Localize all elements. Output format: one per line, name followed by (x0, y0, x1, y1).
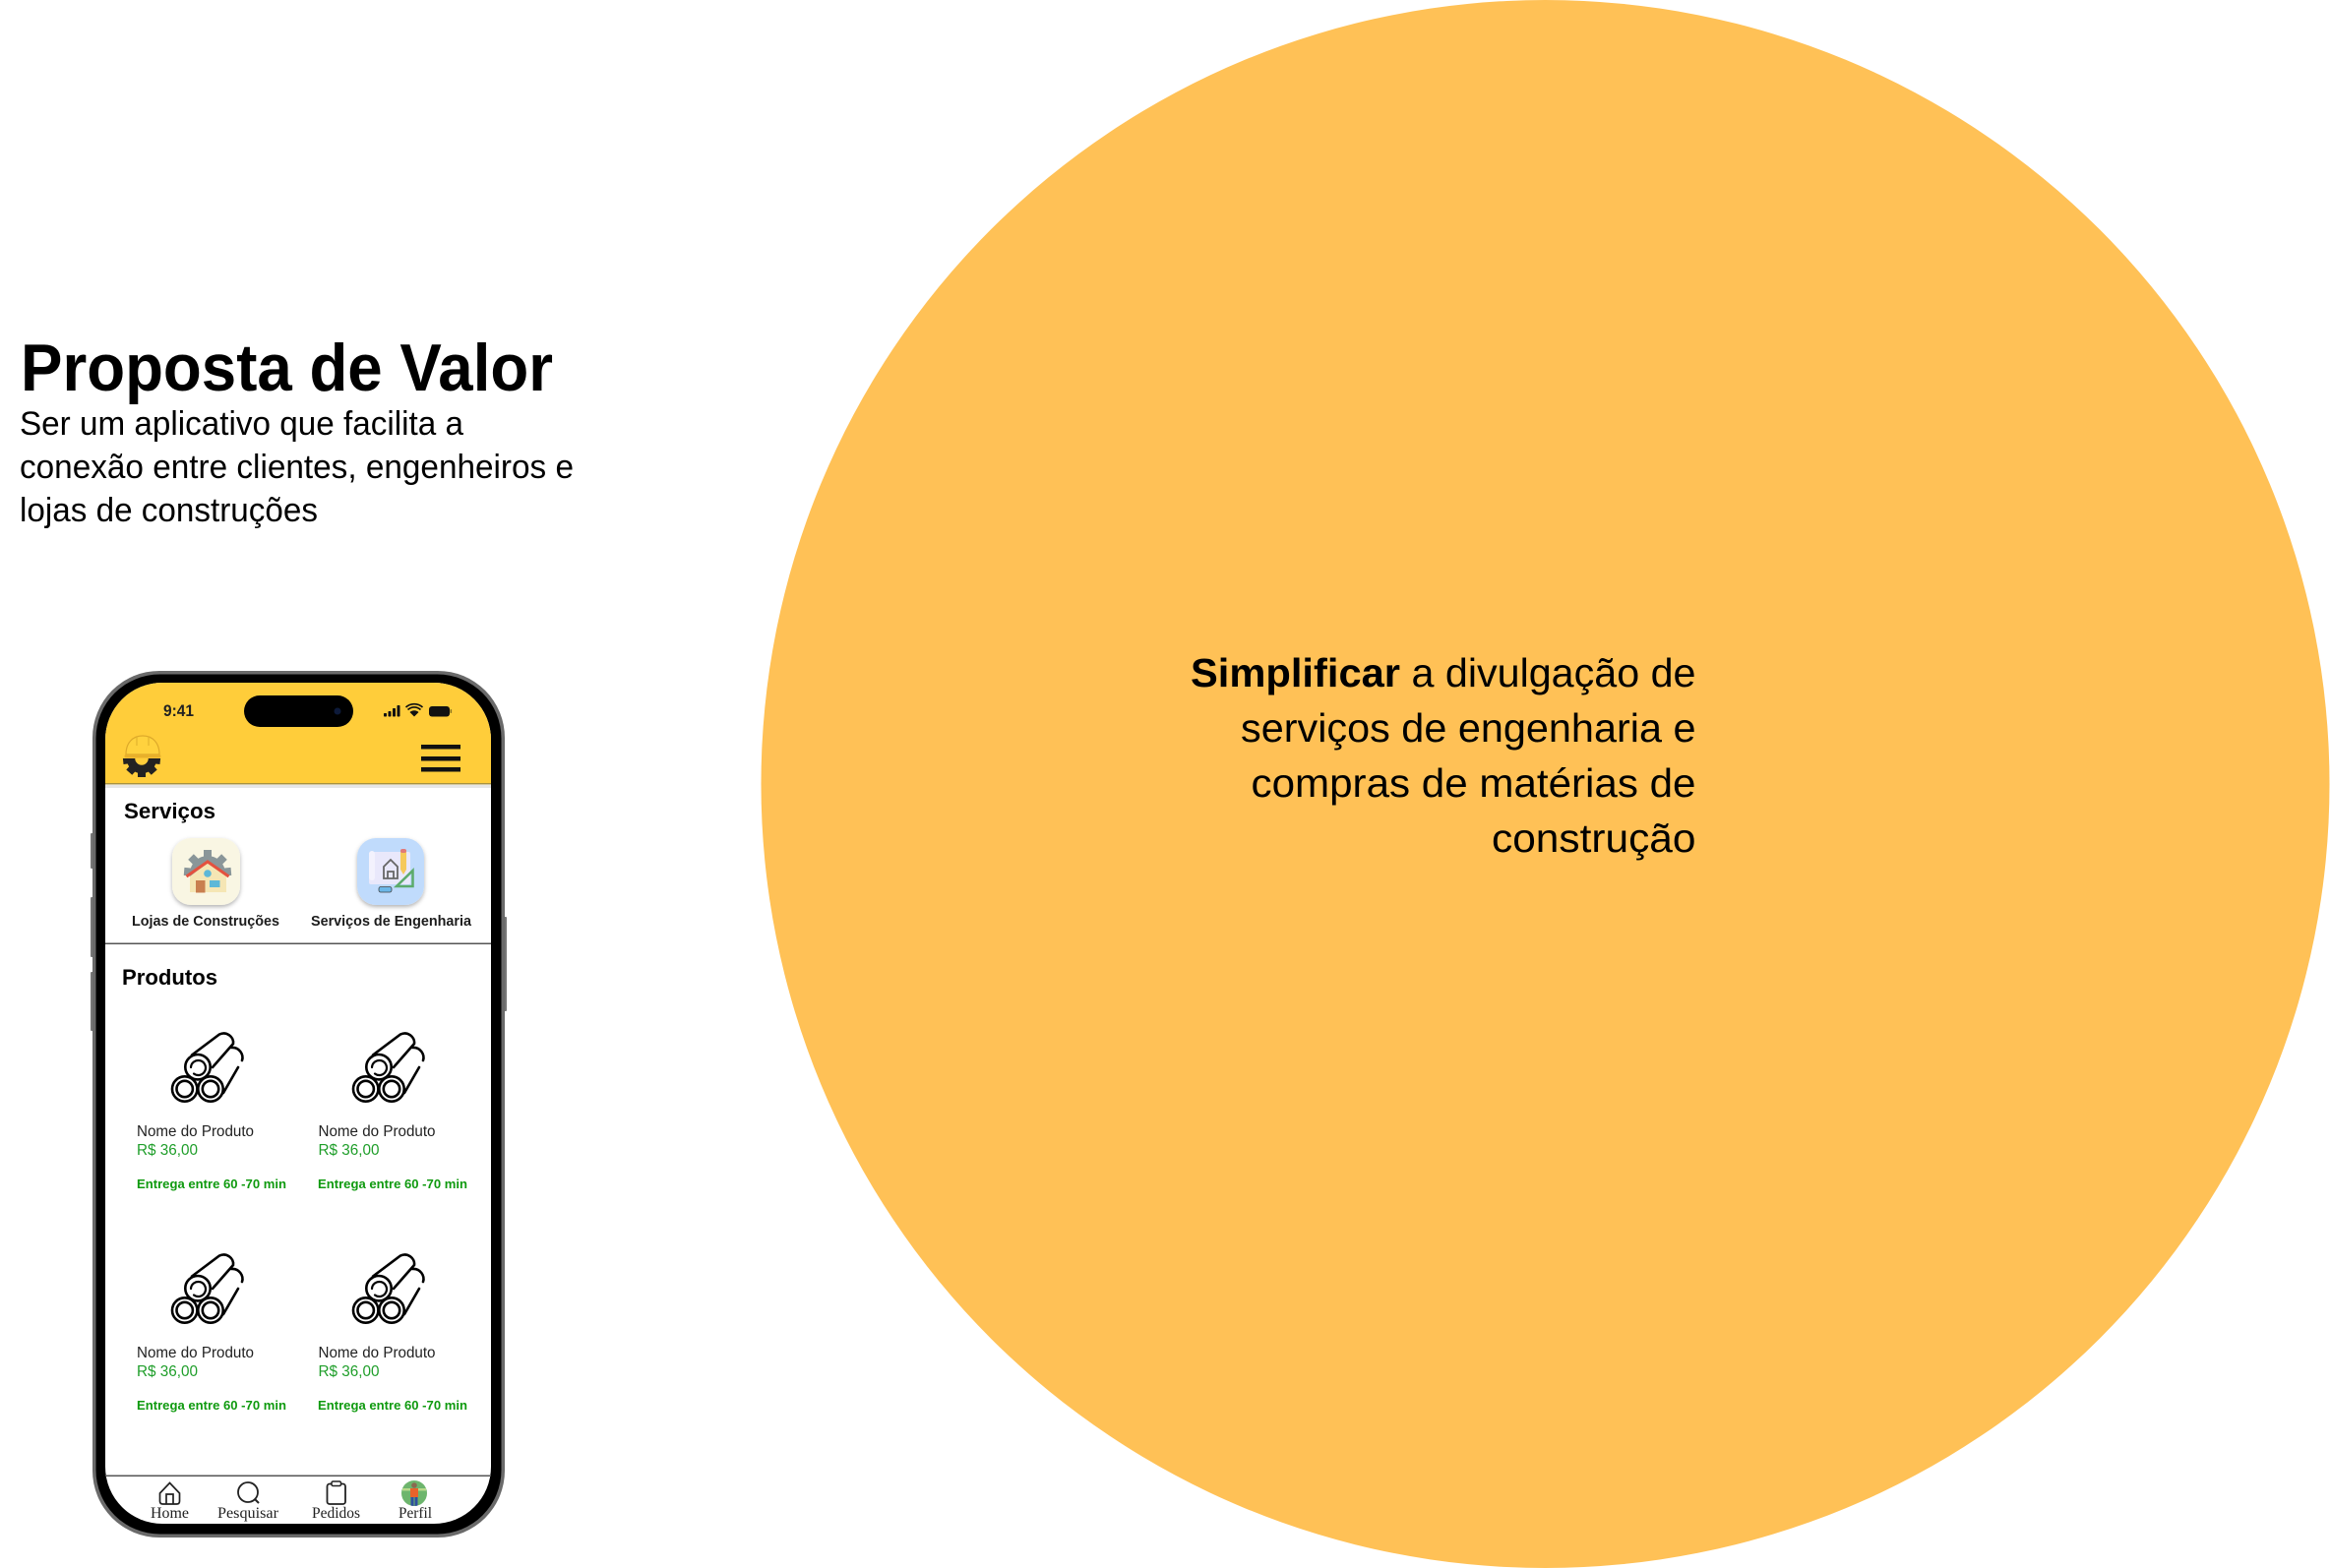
nav: home (151, 1483, 189, 1522)
circle statement text (1191, 650, 1696, 861)
service icon: serviços de engenharia (357, 838, 424, 905)
circle statement text: construção (1492, 815, 1696, 861)
nav: pedidos (312, 1481, 360, 1522)
product card 2: Entrega entre 60 -70 min (318, 1176, 467, 1191)
circle statement text: serviços de engenharia e (1241, 705, 1696, 751)
product card 3: R$ 36,00 (137, 1363, 198, 1380)
product card 2: Nome do Produto (319, 1123, 435, 1140)
nav: pesquisar: Pesquisar (217, 1505, 279, 1522)
product card 4: Entrega entre 60 -70 min (318, 1398, 467, 1413)
phone frame (92, 671, 505, 1538)
product card 2 (318, 1033, 467, 1191)
nav: home: Home (151, 1505, 189, 1522)
service labels (132, 914, 472, 930)
product card 4: Nome do Produto (319, 1345, 435, 1361)
circle statement text: a divulgação de (1411, 650, 1696, 695)
services heading: Serviços (124, 799, 215, 823)
dynamic island (244, 695, 353, 727)
product card 2: R$ 36,00 (319, 1142, 380, 1159)
status icons (384, 704, 452, 716)
nav: perfil: Perfil (399, 1505, 433, 1522)
products heading: Produtos (122, 965, 217, 990)
title: Proposta de Valor (21, 331, 553, 405)
product card 1: Entrega entre 60 -70 min (137, 1176, 286, 1191)
service icon: lojas de construções (172, 838, 240, 905)
nav: perfil (399, 1480, 432, 1518)
product card 1 (137, 1033, 286, 1191)
app screen (105, 683, 491, 788)
product card 4: R$ 36,00 (319, 1363, 380, 1380)
circle statement text: Simplificar (1191, 650, 1400, 695)
status time: 9:41 (163, 702, 194, 720)
description text: Ser um aplicativo que facilita a (20, 405, 463, 443)
service labels: Lojas de Construções (132, 914, 279, 930)
phone mockup (91, 671, 507, 1538)
yellow header (105, 683, 491, 784)
description text: conexão entre clientes, engenheiros e (20, 449, 574, 486)
product card 3 (137, 1254, 286, 1413)
service labels: Serviços de Engenharia (311, 914, 472, 930)
circle statement text: compras de matérias de (1252, 760, 1696, 806)
description text (20, 405, 574, 529)
product card 3: Entrega entre 60 -70 min (137, 1398, 286, 1413)
description text: lojas de construções (20, 492, 318, 529)
yellow circle (762, 0, 2330, 1568)
nav: pesquisar (217, 1482, 279, 1522)
product card 3: Nome do Produto (137, 1345, 254, 1361)
product card 4 (318, 1254, 467, 1413)
logo: helmet and gear (123, 736, 161, 777)
hamburger menu (421, 745, 460, 771)
product card 1: R$ 36,00 (137, 1142, 198, 1159)
nav: pedidos: Pedidos (312, 1505, 360, 1522)
product card 1: Nome do Produto (137, 1123, 254, 1140)
side buttons (91, 833, 507, 1031)
